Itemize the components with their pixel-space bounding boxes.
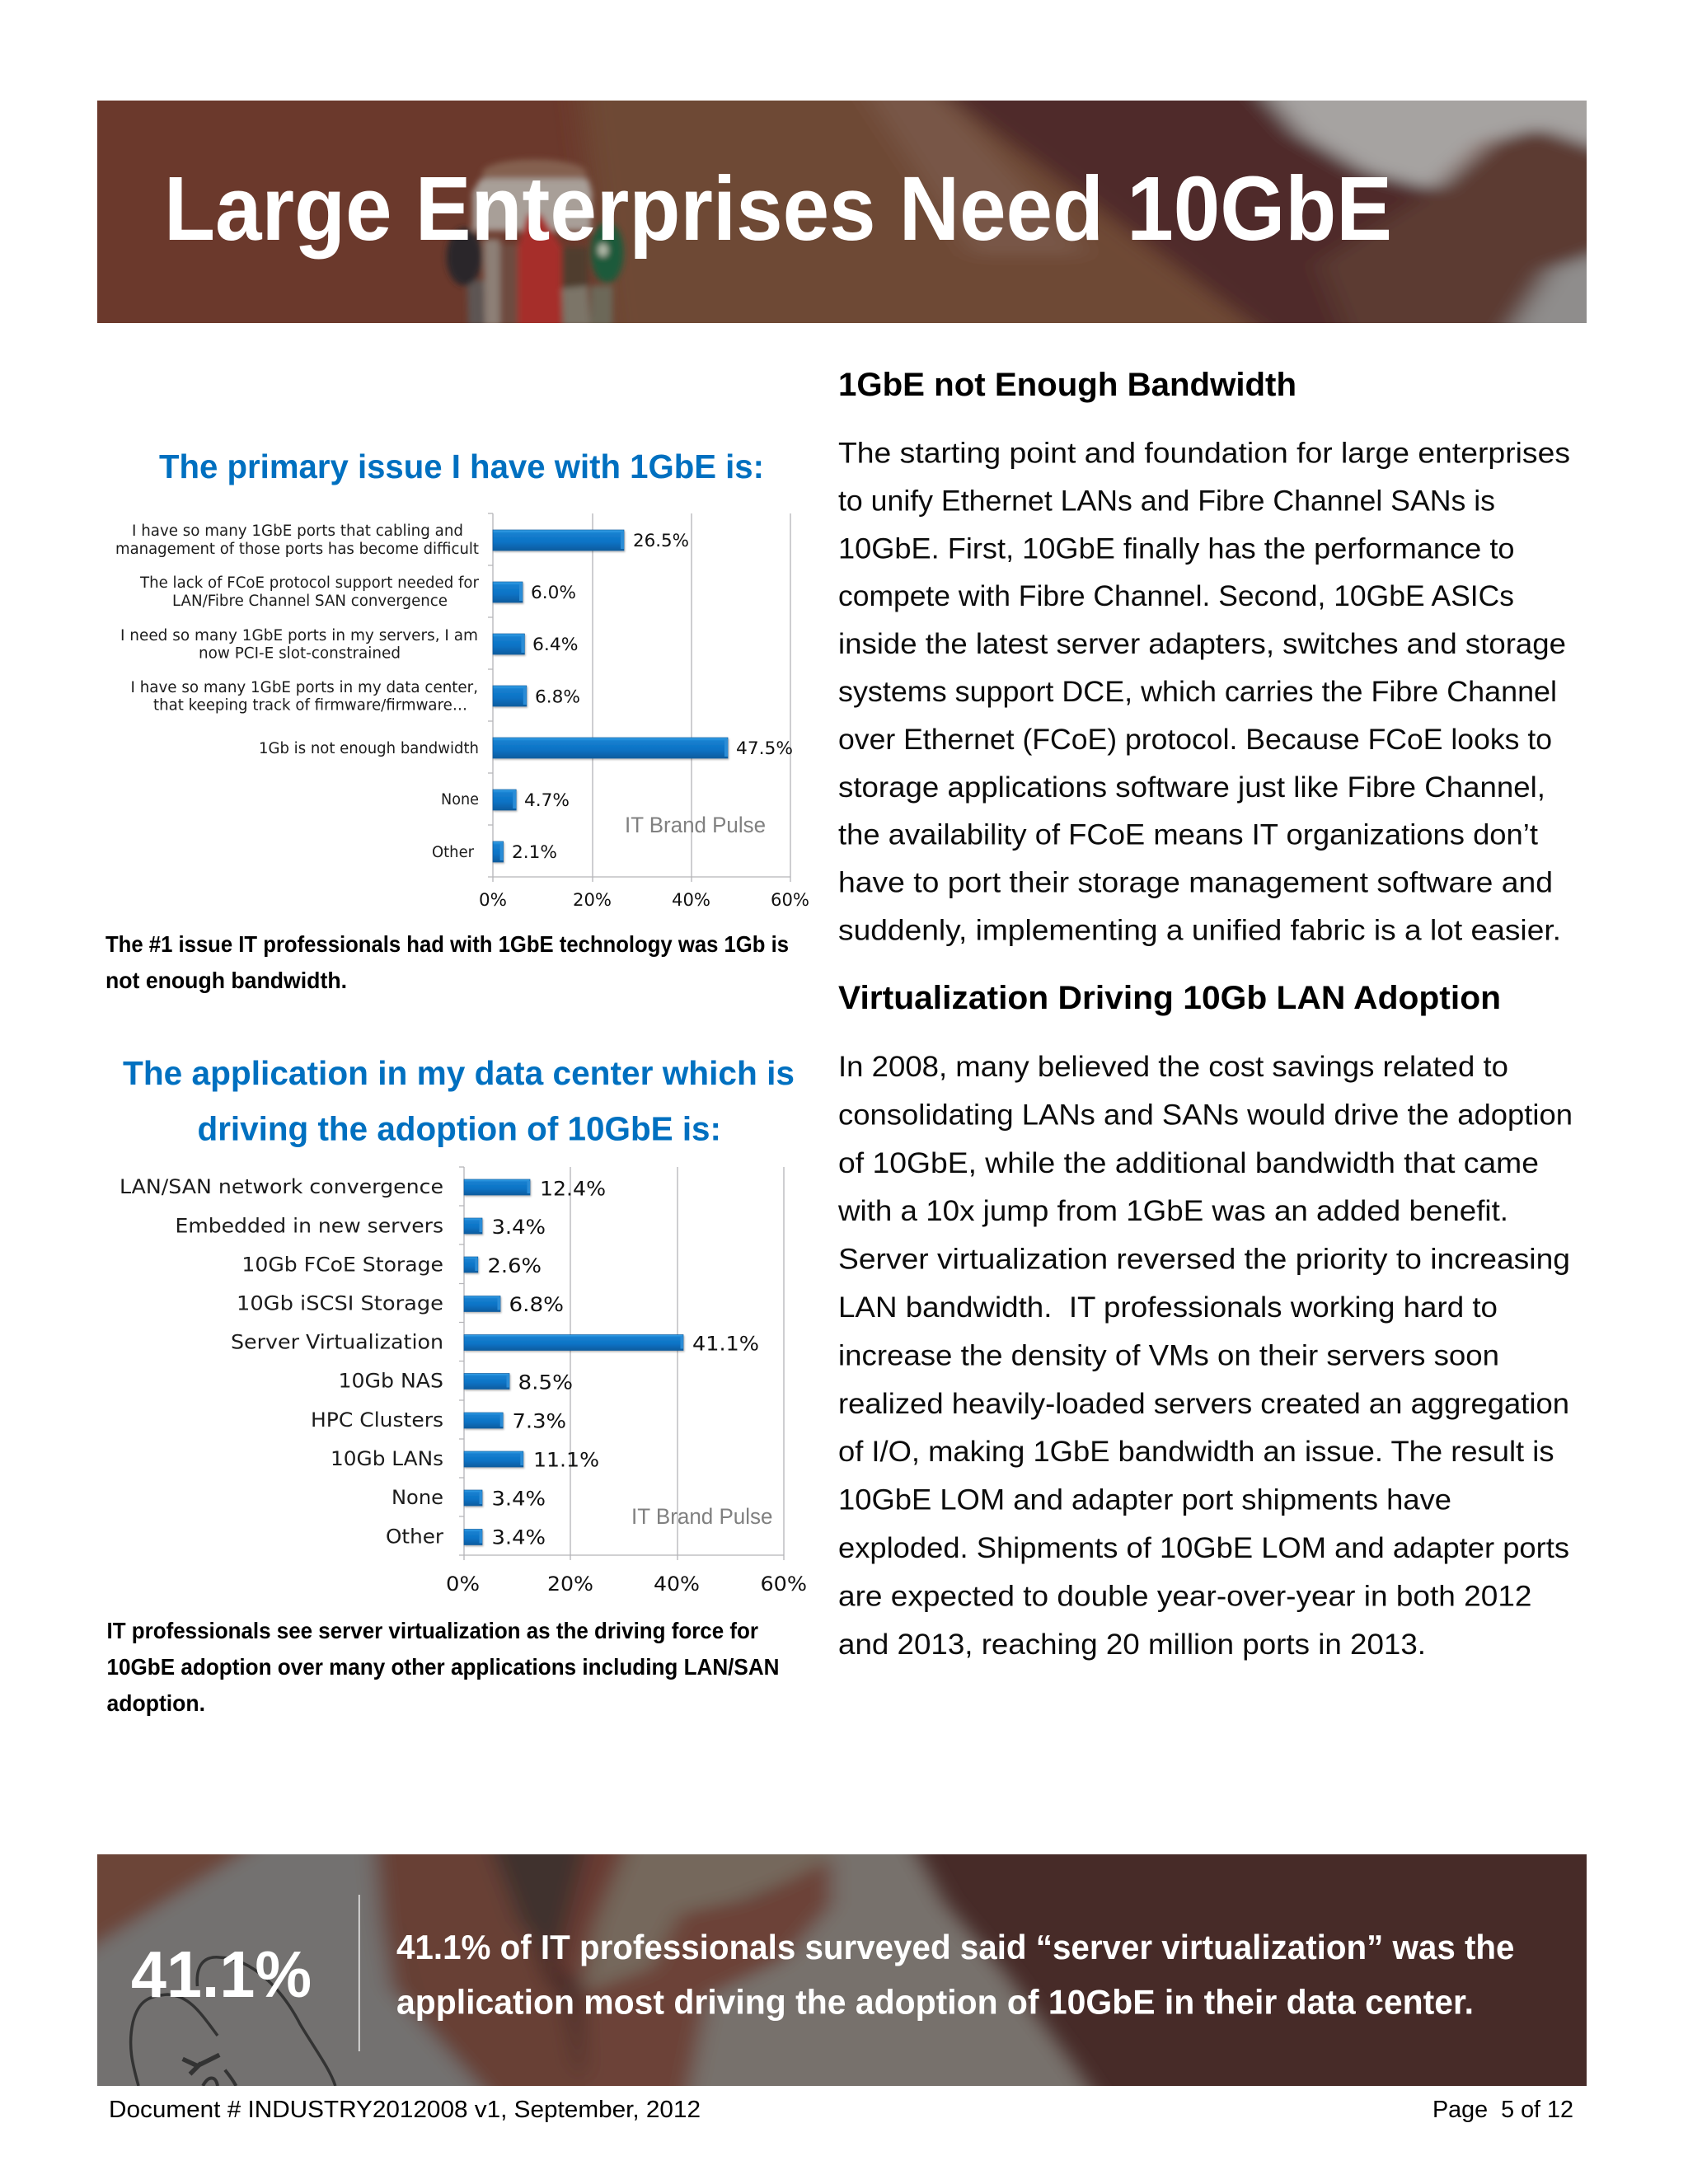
chart 2 category labels: 10Gb FCoE Storage xyxy=(241,1253,443,1276)
chart 1 value labels: 6.0% xyxy=(531,583,576,603)
chart 2 category labels xyxy=(120,1175,443,1548)
text block: first paragraph: over Ethernet (FCoE) protocol. Because FCoE looks to xyxy=(838,723,1552,756)
chart 2 heading: driving the adoption of 10GbE is: xyxy=(198,1109,721,1147)
panel: right column article xyxy=(837,367,1573,1661)
chart 2 value labels: 11.1% xyxy=(533,1449,599,1472)
chart 2 category labels: 10Gb NAS xyxy=(338,1370,443,1393)
callout text: application most driving the adoption of 10GbE in their data center. xyxy=(396,1983,1474,2021)
chart 2 value labels: 2.6% xyxy=(488,1254,542,1277)
text block: first paragraph: compete with Fibre Channel. Second, 10GbE ASICs xyxy=(838,579,1514,612)
text block: second paragraph: 10GbE LOM and adapter port shipments have xyxy=(838,1483,1451,1516)
text block: second paragraph: Server virtualization reversed the priority to increasing xyxy=(838,1243,1570,1276)
footer: document number: Document # INDUSTRY2012008 v1, September, 2012 xyxy=(109,2097,701,2123)
text block: second paragraph: realized heavily-loaded servers created an aggregation xyxy=(838,1387,1569,1420)
footer: page number: Page 5 of 12 xyxy=(1432,2097,1573,2123)
chart 1 category labels: now PCI-E slot-constrained xyxy=(199,644,401,663)
chart 2 axis labels: 60% xyxy=(760,1572,807,1596)
chart 1 bar chart xyxy=(493,530,728,862)
chart 1 category labels: I need so many 1GbE ports in my servers, I am xyxy=(120,627,478,644)
chart 2 category labels: Server Virtualization xyxy=(231,1330,443,1353)
chart 1 axis labels: 60% xyxy=(771,890,809,911)
chart 2 value labels: 3.4% xyxy=(491,1216,546,1239)
text block: second paragraph: and 2013, reaching 20 million ports in 2013. xyxy=(838,1628,1426,1661)
chart 2 value labels xyxy=(488,1177,759,1549)
chart 2 caption: 10GbE adoption over many other applications including LAN/SAN xyxy=(107,1654,780,1680)
chart 1 watermark: IT Brand Pulse xyxy=(625,813,766,837)
chart 2 category labels: Embedded in new servers xyxy=(175,1215,443,1238)
text block: first paragraph: 10GbE. First, 10GbE finally has the performance to xyxy=(838,532,1515,565)
chart 1 category labels: None xyxy=(441,791,479,808)
chart 2 bar chart xyxy=(464,1179,683,1544)
chart 1 value labels: 4.7% xyxy=(524,790,570,811)
chart 1 axis labels xyxy=(479,890,809,911)
chart 2 caption xyxy=(107,1618,780,1716)
chart 2 category labels: 10Gb iSCSI Storage xyxy=(237,1292,443,1315)
chart 2 heading: The application in my data center which is xyxy=(123,1054,795,1092)
chart 1 value labels: 6.4% xyxy=(532,635,579,655)
text block: second paragraph: are expected to double year-over-year in both 2012 xyxy=(838,1579,1531,1612)
chart 2 category labels: HPC Clusters xyxy=(311,1408,443,1432)
chart 2 caption: adoption. xyxy=(107,1690,205,1716)
chart 1 caption xyxy=(106,931,789,993)
chart 1 gridlines and axes xyxy=(488,513,790,882)
panel: header banner xyxy=(97,101,1587,323)
chart 1 category labels: Other xyxy=(432,844,474,861)
chart 2 value labels: 3.4% xyxy=(491,1487,546,1510)
text block: first paragraph xyxy=(838,437,1570,946)
callout number: 41.1% xyxy=(131,1938,312,2011)
chart 1 axis labels: 0% xyxy=(479,890,507,911)
chart 1 category labels: LAN/Fibre Channel SAN convergence xyxy=(172,593,448,610)
text block: second paragraph: of 10GbE, while the additional bandwidth that came xyxy=(838,1146,1539,1179)
chart 2 watermark: IT Brand Pulse xyxy=(631,1504,773,1529)
text block: first paragraph: storage applications software just like Fibre Channel, xyxy=(838,771,1545,804)
chart 2 category labels: 10Gb LANs xyxy=(331,1447,443,1470)
chart 2 category labels: LAN/SAN network convergence xyxy=(120,1175,443,1198)
chart 2 value labels: 6.8% xyxy=(509,1293,564,1316)
chart 1 category labels: I have so many 1GbE ports that cabling and xyxy=(132,523,463,540)
chart 1 caption: not enough bandwidth. xyxy=(106,968,347,993)
text block: second paragraph: with a 10x jump from 1GbE was an added benefit. xyxy=(837,1194,1508,1227)
text block: first paragraph: The starting point and foundation for large enterprises xyxy=(838,437,1570,470)
panel: bottom callout banner xyxy=(97,1854,1587,2086)
text block: first paragraph: suddenly, implementing a unified fabric is a lot easier. xyxy=(838,913,1561,946)
chart 1 category labels xyxy=(115,523,479,861)
text block: first paragraph: to unify Ethernet LANs and Fibre Channel SANs is xyxy=(838,484,1495,517)
chart 2 axis labels: 40% xyxy=(654,1572,700,1596)
text block: second paragraph: LAN bandwidth. IT professionals working hard to xyxy=(838,1291,1498,1324)
chart 1 category labels: The lack of FCoE protocol support needed for xyxy=(139,574,479,592)
chart 1 value labels: 26.5% xyxy=(633,531,689,551)
chart 1 axis labels: 40% xyxy=(672,890,710,911)
chart 2 category labels: None xyxy=(392,1486,443,1509)
chart 2 value labels: 8.5% xyxy=(518,1371,573,1394)
chart 2 heading xyxy=(123,1054,795,1147)
heading: Virtualization Driving 10Gb LAN Adoption: Virtualization Driving 10Gb LAN Adoption xyxy=(838,980,1501,1016)
chart 1 value labels: 47.5% xyxy=(736,738,793,759)
chart 1 category labels: 1Gb is not enough bandwidth xyxy=(259,740,479,757)
chart 2 axis labels xyxy=(446,1572,807,1596)
chart 1 category labels: management of those ports has become difficult xyxy=(115,541,479,558)
callout text xyxy=(396,1928,1515,2021)
panel: chart 1 primary issue with 1GbE xyxy=(106,448,809,993)
text block: second paragraph: exploded. Shipments of 10GbE LOM and adapter ports xyxy=(838,1531,1569,1564)
chart 2 axis labels: 0% xyxy=(446,1572,480,1596)
chart 1 category labels: I have so many 1GbE ports in my data center, xyxy=(130,679,478,696)
chart 1 value labels: 2.1% xyxy=(512,842,557,863)
chart 2 value labels: 41.1% xyxy=(692,1332,759,1355)
chart 2 category labels: Other xyxy=(386,1525,443,1548)
text block: second paragraph: consolidating LANs and SANs would drive the adoption xyxy=(838,1098,1573,1131)
chart 1 category labels: that keeping track of firmware/firmware… xyxy=(153,697,467,714)
text block: second paragraph xyxy=(837,1050,1573,1661)
chart 1 value labels: 6.8% xyxy=(535,687,580,707)
text block: first paragraph: systems support DCE, which carries the Fibre Channel xyxy=(838,675,1557,708)
callout divider xyxy=(359,1895,360,2051)
chart 2 gridlines and axes xyxy=(459,1167,784,1560)
text block: first paragraph: the availability of FCoE means IT organizations don’t xyxy=(838,818,1538,851)
callout text: 41.1% of IT professionals surveyed said “server virtualization” was the xyxy=(396,1928,1515,1966)
chart 2 caption: IT professionals see server virtualization as the driving force for xyxy=(107,1618,758,1643)
text block: first paragraph: have to port their storage management software and xyxy=(838,866,1553,899)
text block: second paragraph: In 2008, many believed the cost savings related to xyxy=(838,1050,1508,1083)
heading: 1GbE not Enough Bandwidth: 1GbE not Enough Bandwidth xyxy=(838,367,1296,403)
panel: chart 2 application driving adoption xyxy=(107,1054,807,1716)
banner photo: blurred cable background xyxy=(97,101,1587,323)
chart 1 caption: The #1 issue IT professionals had with 1GbE technology was 1Gb is xyxy=(106,931,789,957)
chart 1 value labels xyxy=(512,531,793,863)
chart 1 heading: The primary issue I have with 1GbE is: xyxy=(159,448,764,485)
chart 1 axis labels: 20% xyxy=(573,890,612,911)
chart 2 value labels: 3.4% xyxy=(491,1526,546,1549)
chart 2 value labels: 7.3% xyxy=(513,1409,566,1432)
callout photo background with pencil sketch xyxy=(97,1854,1587,2086)
chart 2 value labels: 12.4% xyxy=(540,1177,606,1200)
title: Large Enterprises Need 10GbE xyxy=(164,158,1392,260)
text block: first paragraph: inside the latest server adapters, switches and storage xyxy=(838,627,1566,660)
text block: second paragraph: increase the density of VMs on their servers soon xyxy=(838,1338,1499,1371)
chart 2 axis labels: 20% xyxy=(547,1572,593,1596)
text block: second paragraph: of I/O, making 1GbE bandwidth an issue. The result is xyxy=(838,1435,1554,1468)
